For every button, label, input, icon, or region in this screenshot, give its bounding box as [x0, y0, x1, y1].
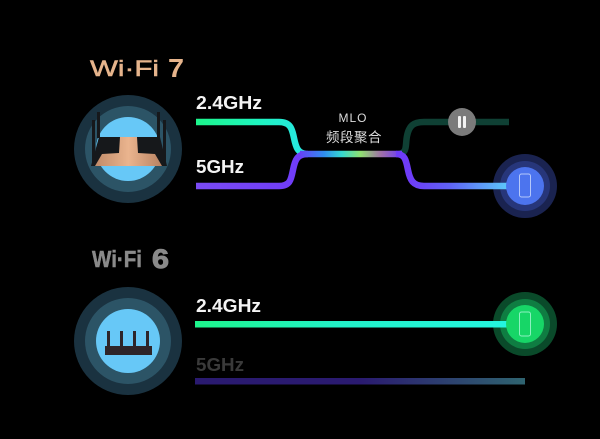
label: 2.4GHz bottom: 2.4GHz [196, 295, 261, 316]
Wi-Fi 6 5GHz dim line [195, 378, 525, 384]
icon: green phone node [506, 305, 544, 343]
label: 5GHz top: 5GHz [196, 156, 244, 177]
Wi-Fi 6 heading: Wi·Fi [92, 246, 142, 272]
output line to phone [396, 154, 510, 186]
icon: blue phone node [506, 167, 544, 205]
label: 2.4GHz top: 2.4GHz [196, 92, 262, 113]
Wi-Fi 6 heading: 6 [152, 244, 169, 274]
router base [95, 137, 162, 166]
icon: Wi-Fi 7 router in concentric circles [74, 95, 182, 203]
label: MLO Chinese caption: 频段聚合 [326, 130, 382, 145]
2.4GHz input line [196, 122, 306, 154]
label: MLO: MLO [338, 111, 368, 125]
icon: pause button [448, 108, 476, 136]
Wi-Fi 7 heading: Wi·Fi [90, 56, 159, 81]
Wi-Fi 6 heading [92, 244, 169, 274]
dim upper output line [398, 122, 509, 154]
icon: Wi-Fi 6 router in concentric circles [74, 287, 182, 395]
Wi-Fi 7 heading: 7 [168, 53, 184, 83]
green node rings [493, 292, 557, 356]
Wi-Fi 7 heading [90, 53, 184, 83]
blue node rings [493, 154, 557, 218]
5GHz input line [196, 154, 308, 186]
label: 5GHz bottom dimmed: 5GHz [196, 354, 244, 375]
Wi-Fi 6 2.4GHz line [195, 321, 511, 328]
MLO merged band [300, 151, 402, 157]
